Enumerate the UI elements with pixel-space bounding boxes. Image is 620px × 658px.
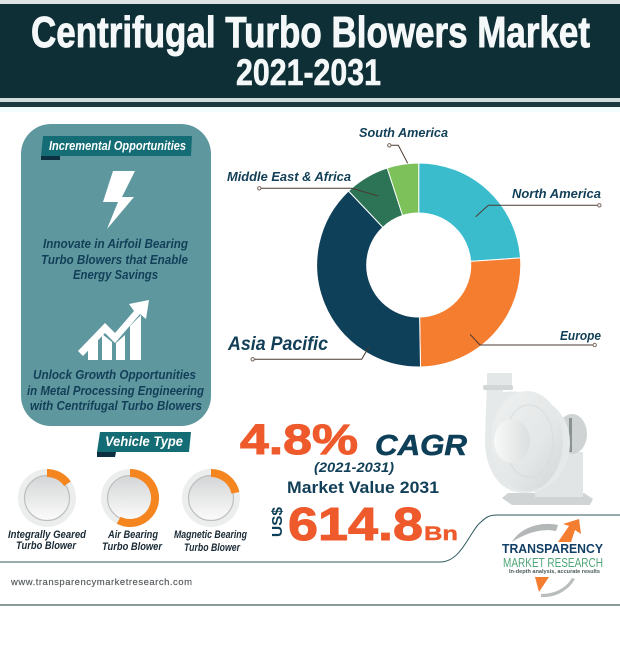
- gauge: magnetic bearing: [174, 469, 247, 554]
- ribbon: incremental opportunities: Incremental Opportunities: [49, 138, 186, 153]
- leader lines: [251, 144, 601, 361]
- text: airfoil bearing opportunity: Energy Savings: [73, 267, 158, 282]
- text: metal processing opportunity: [27, 367, 204, 413]
- icon: lightning bolt: [103, 171, 135, 229]
- logo: Transparency Market Research: In-depth analysis, accurate results: [509, 569, 600, 575]
- ribbon: incremental opportunities: [41, 136, 192, 160]
- website url: www.transparencymarketresearch.com: [10, 577, 192, 588]
- logo arcs and arrows: [512, 519, 581, 597]
- ribbon: vehicle type: [97, 432, 191, 457]
- region labels: Europe: [560, 328, 601, 343]
- text: metal processing opportunity: with Centrifugal Turbo Blowers: [30, 398, 202, 413]
- footer curve divider: [0, 515, 620, 562]
- stat: market value: [269, 478, 458, 550]
- stat: market value: Bn: [424, 524, 458, 545]
- icon: growth chart: [78, 300, 149, 360]
- stat: CAGR: CAGR: [375, 430, 467, 462]
- gauge: air bearing: Turbo Blower: [102, 541, 163, 553]
- subtitle years: 2021-2031: [236, 52, 381, 93]
- region labels: South America: [359, 125, 448, 140]
- region labels: North America: [512, 186, 601, 201]
- ribbon: vehicle type: Vehicle Type: [105, 433, 183, 449]
- gauge: magnetic bearing: Magnetic Bearing: [174, 529, 247, 541]
- gauge: integrally geared: Integrally Geared: [8, 529, 86, 541]
- logo: Transparency Market Research: [502, 519, 604, 597]
- panel: incremental opportunities: [21, 124, 211, 426]
- text: airfoil bearing opportunity: Innovate in Airfoil Bearing: [43, 236, 188, 251]
- gauge: air bearing: [101, 469, 163, 553]
- stat: market value: 614.8: [288, 498, 423, 550]
- gauge: integrally geared: [8, 469, 86, 552]
- text: airfoil bearing opportunity: [41, 236, 188, 282]
- stat: market value: US$: [269, 506, 286, 537]
- text: metal processing opportunity: in Metal Processing Engineering: [27, 383, 204, 398]
- text: airfoil bearing opportunity: Turbo Blowers that Enable: [41, 252, 188, 267]
- region labels: Asia Pacific: [227, 334, 328, 355]
- segment: South America: [387, 163, 419, 216]
- segment: Asia Pacific: [317, 191, 420, 367]
- stat: market value: Market Value 2031: [287, 478, 439, 497]
- text: metal processing opportunity: Unlock Growth Opportunities: [33, 367, 196, 382]
- bottom rule: [0, 604, 620, 606]
- logo: Transparency Market Research: TRANSPARENCY: [502, 542, 604, 556]
- header band: [0, 0, 620, 112]
- segment: North America: [419, 163, 520, 261]
- stat: CAGR: [240, 416, 467, 475]
- segment: Middle East and Africa: [348, 168, 403, 227]
- segment: Europe: [420, 258, 521, 367]
- gauge: integrally geared: Turbo Blower: [16, 540, 77, 552]
- stat: CAGR: (2021-2031): [314, 459, 394, 475]
- donut chart: regions: [317, 163, 521, 367]
- stat: CAGR: 4.8%: [240, 416, 358, 464]
- illustration: centrifugal blower: [483, 373, 593, 505]
- region labels: [227, 125, 601, 355]
- region labels: Middle East & Africa: [227, 169, 351, 184]
- gauge: air bearing: Air Bearing: [107, 529, 158, 541]
- gauge: magnetic bearing: Turbo Blower: [184, 542, 241, 554]
